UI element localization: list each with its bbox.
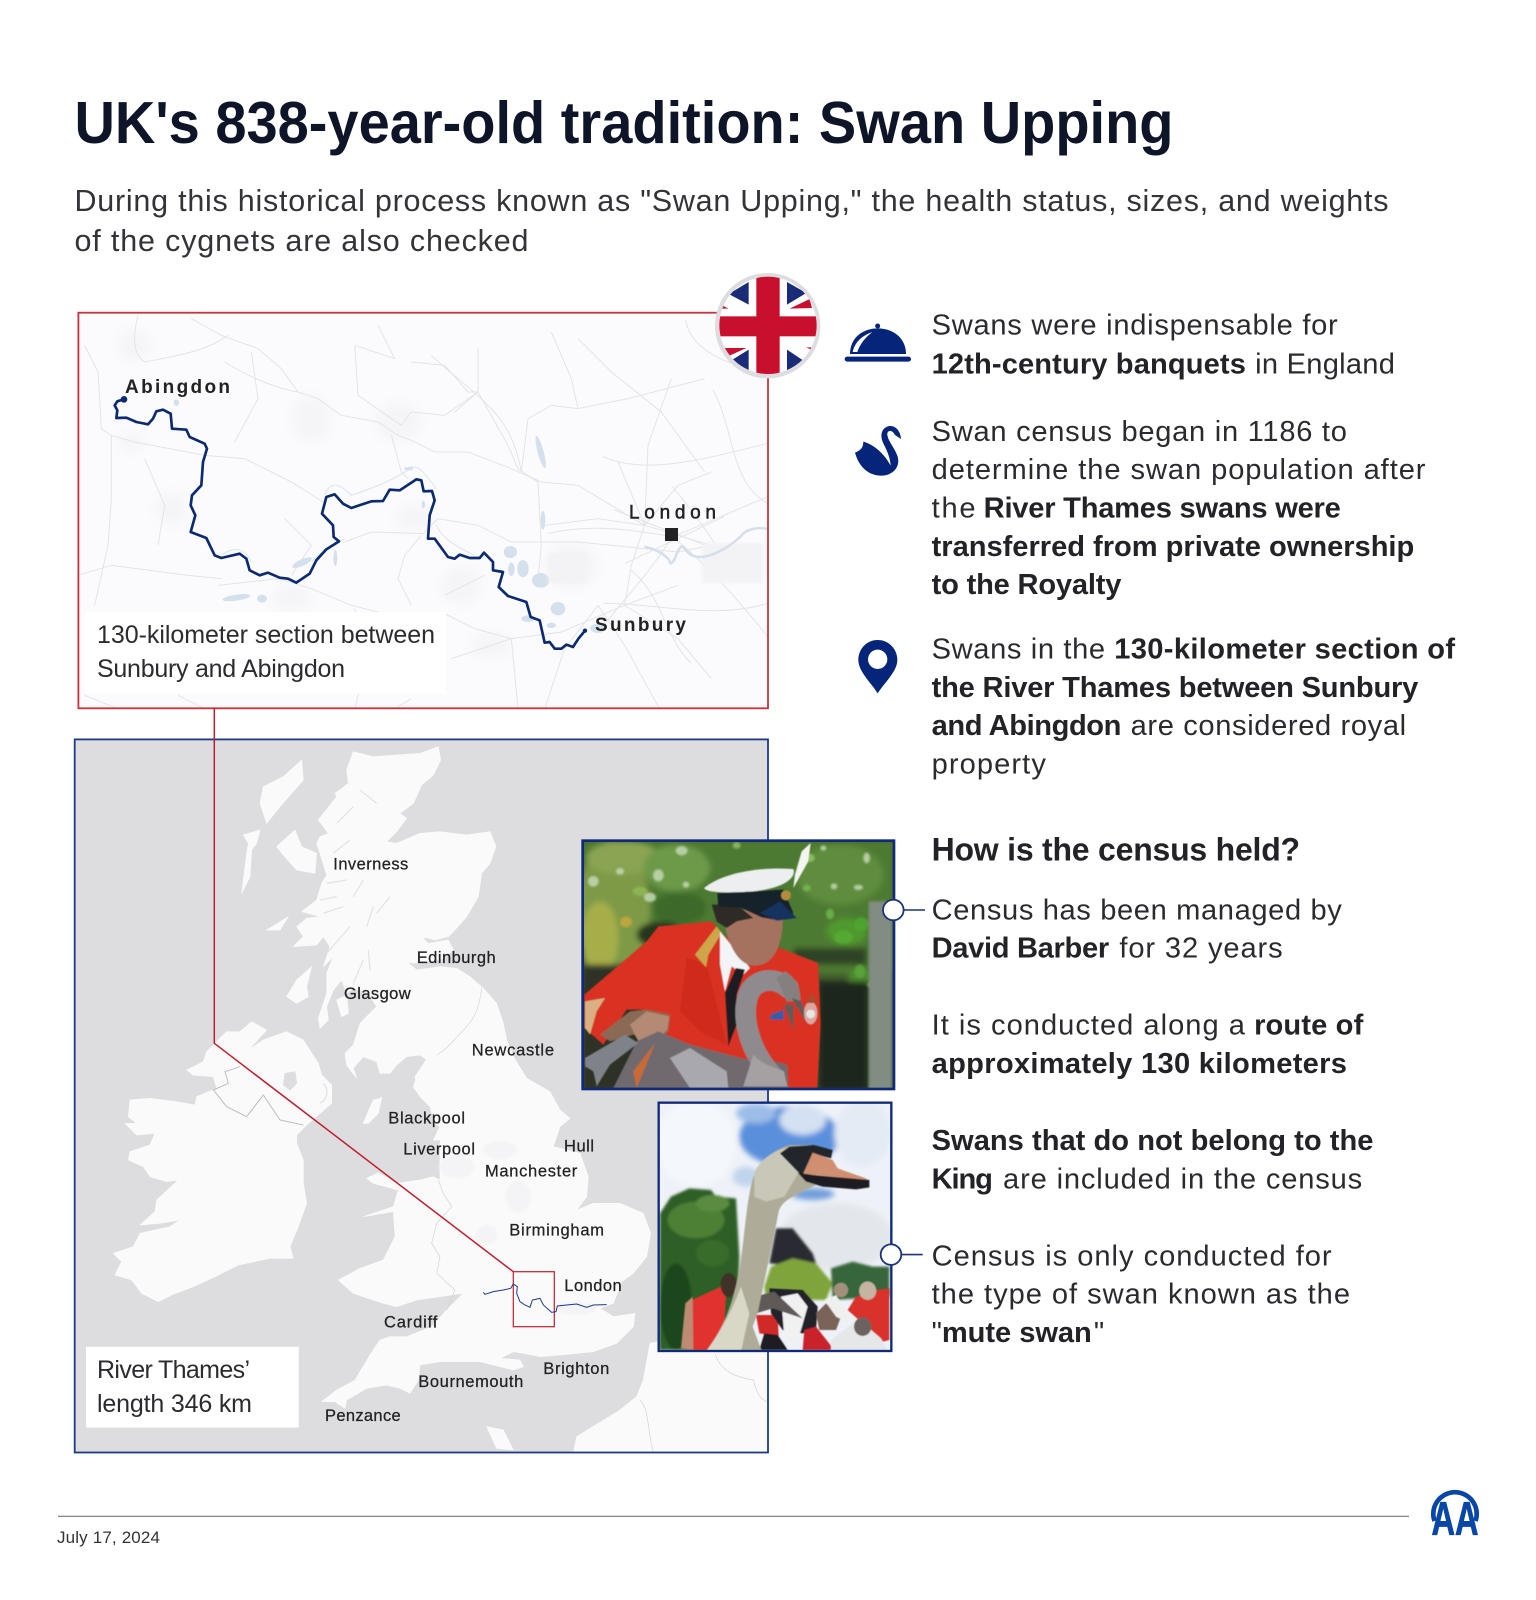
- text block: census history: the: [932, 492, 976, 524]
- text block: census history: River Thames swans were: [984, 492, 1341, 524]
- city labels: Liverpool: [403, 1140, 475, 1158]
- city labels: Newcastle: [472, 1042, 554, 1060]
- city labels: Penzance: [325, 1407, 401, 1425]
- city labels: Edinburgh: [417, 949, 496, 967]
- text block: route: It is conducted along a: [932, 1010, 1246, 1042]
- subtitle: During this historical process known as "Swan Upping," the health status, sizes, and weights: [74, 184, 1388, 218]
- text block: route: approximately 130 kilometers: [932, 1048, 1347, 1080]
- text block: royal property: are considered royal: [1131, 710, 1406, 742]
- text block: royal property: and Abingdon: [932, 710, 1121, 742]
- river Thames on UK map: [483, 1284, 607, 1312]
- text block: mute swan: mute swan: [942, 1317, 1092, 1349]
- panel: UK map: [75, 708, 768, 1453]
- text block: David Barber: Census has been managed by: [932, 894, 1342, 926]
- city labels: Blackpool: [388, 1109, 465, 1127]
- photo: Swan Marker in red uniform with cygnet: [577, 841, 894, 1091]
- text block: mute swan: Census is only conducted for: [932, 1240, 1332, 1272]
- text block: banquets: 12th-century banquets: [932, 348, 1246, 380]
- photo: mute swan close-up: [656, 1100, 893, 1352]
- subtitle: of the cygnets are also checked: [74, 224, 528, 258]
- city labels: Glasgow: [344, 985, 411, 1003]
- text block: banquets: [932, 310, 1395, 380]
- callout: river length: [86, 1347, 299, 1428]
- text block: mute swan: the type of swan known as the: [932, 1279, 1350, 1311]
- marker: London square: [665, 528, 678, 541]
- city labels: [325, 855, 622, 1425]
- text block: non-royal swans: Swans that do not belong to the: [932, 1125, 1373, 1157]
- text block: route: route of: [1254, 1010, 1364, 1042]
- connector: red leader line and inset rectangle: [214, 708, 554, 1327]
- icon: banquet cloche: [845, 323, 911, 362]
- subtitle: [74, 184, 1388, 258]
- footer date: July 17, 2024: [57, 1528, 160, 1547]
- text block: census history: determine the swan population after: [932, 454, 1426, 486]
- text block: mute swan: ": [932, 1317, 942, 1349]
- city labels: Cardiff: [384, 1314, 438, 1332]
- text block: census history: to the Royalty: [932, 569, 1122, 601]
- icon: swan: [855, 426, 901, 476]
- map: Scotland and northern England: [242, 747, 523, 1140]
- callout: section length: [85, 612, 446, 694]
- callout: river length: River Thames’: [97, 1356, 250, 1384]
- text block: census history: transferred from private ownership: [932, 531, 1414, 563]
- text block: royal property: property: [932, 748, 1046, 780]
- city labels: London: [564, 1277, 622, 1295]
- text block: census history: Swan census began in 1186 to: [932, 416, 1347, 448]
- callout: section length: Sunbury and Abingdon: [97, 655, 345, 683]
- icon: location pin: [858, 640, 897, 693]
- callout: river length: length 346 km: [97, 1390, 252, 1418]
- city labels: Birmingham: [509, 1222, 604, 1240]
- text block: mute swan: ": [1094, 1317, 1104, 1349]
- city labels: Hull: [564, 1138, 594, 1156]
- map: Ireland: [113, 1022, 332, 1302]
- connector: photo 1 to first census note: [883, 900, 925, 920]
- text block: non-royal swans: King: [932, 1163, 993, 1195]
- text block: David Barber: David Barber: [932, 933, 1109, 965]
- label: London: London: [629, 502, 716, 524]
- city labels: Manchester: [485, 1163, 578, 1181]
- city labels: Bournemouth: [418, 1373, 523, 1391]
- icon: UK flag: [715, 273, 820, 378]
- logo: Anadolu Agency: [1432, 1492, 1478, 1545]
- text block: census history: [932, 416, 1426, 601]
- text block: banquets: Swans were indispensable for: [932, 310, 1338, 342]
- text block: royal property: 130-kilometer section of: [1114, 634, 1455, 666]
- river Thames route: [115, 396, 587, 649]
- heading: how is the census held: How is the census held?: [932, 832, 1300, 868]
- text block: non-royal swans: [932, 1125, 1373, 1195]
- text block: David Barber: for 32 years: [1119, 933, 1283, 965]
- text block: David Barber: [932, 894, 1342, 965]
- text block: non-royal swans: are included in the census: [1003, 1163, 1362, 1195]
- text block: mute swan: [932, 1240, 1350, 1349]
- city labels: Brighton: [543, 1360, 609, 1378]
- logo: Anadolu Agency: AA: [1432, 1492, 1478, 1545]
- text block: royal property: [932, 634, 1455, 780]
- connector: photo 2 to last census note: [881, 1244, 923, 1265]
- title: UK's 838-year-old tradition: Swan Upping: [74, 90, 1174, 156]
- text block: banquets: in England: [1255, 348, 1395, 380]
- text block: royal property: Swans in the: [932, 634, 1105, 666]
- text block: royal property: the River Thames between Sunbury: [932, 672, 1419, 704]
- label: Abingdon: Abingdon: [125, 377, 230, 398]
- text block: route: [932, 1010, 1364, 1080]
- callout: section length: 130-kilometer section between: [97, 621, 435, 649]
- panel: Thames section map: [78, 313, 768, 712]
- city labels: Inverness: [333, 855, 408, 873]
- label: Sunbury: Sunbury: [595, 615, 686, 636]
- map: England and Wales: [322, 1057, 768, 1453]
